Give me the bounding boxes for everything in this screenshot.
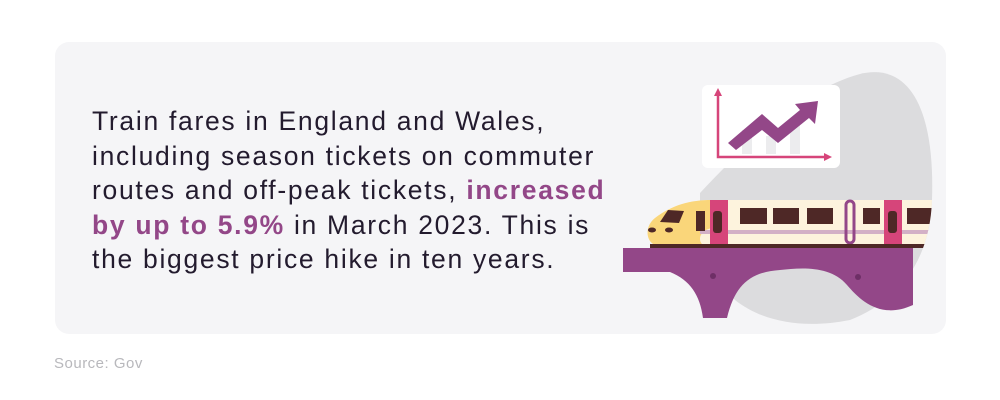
text block: the biggest price hike in ten years. xyxy=(92,244,555,274)
illustration: train on bridge with chart xyxy=(623,72,932,324)
train xyxy=(648,200,960,248)
bridge xyxy=(623,248,913,318)
text block xyxy=(92,106,605,274)
grey blob xyxy=(700,72,932,324)
text block: by up to 5.9% in March 2023. This is xyxy=(92,210,590,240)
text block: Train fares in England and Wales, xyxy=(92,106,545,136)
panel: main card xyxy=(55,42,946,334)
chart card xyxy=(702,85,840,168)
source note: Source: Gov xyxy=(54,355,143,372)
text block: routes and off-peak tickets, increased xyxy=(92,175,605,205)
text block: including season tickets on commuter xyxy=(92,140,595,170)
